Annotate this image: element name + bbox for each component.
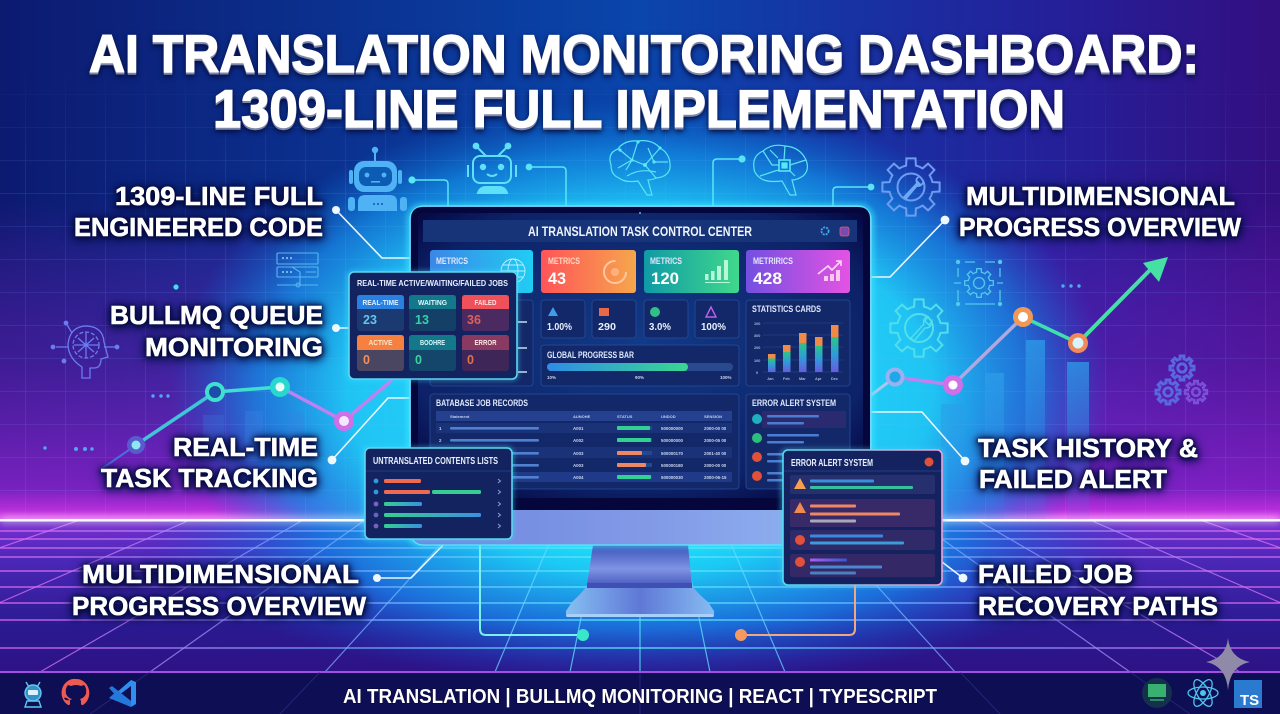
status cell: waiting: WAITING <box>418 298 447 307</box>
database job records table: 2000-06-15 <box>704 475 727 480</box>
status cell: real-time: 23 <box>363 313 377 327</box>
icon: github <box>62 679 89 705</box>
stat tiles: 3.0% <box>649 322 671 333</box>
status cell: error: 0 <box>467 353 474 367</box>
metric card: blue: METRICS <box>436 256 468 266</box>
status cell: error <box>462 335 509 371</box>
statistics cards bar chart <box>746 300 850 386</box>
statistics cards bar chart: 100 <box>754 322 760 326</box>
label: task history and failed alert <box>978 435 1198 494</box>
status cell: waiting <box>409 295 456 331</box>
status cell: boohre: BOOHRE <box>420 338 445 347</box>
global progress bar: 90% <box>635 375 644 380</box>
left line chart <box>100 377 392 470</box>
icon: AI head <box>51 321 119 378</box>
database job records table: A002 <box>573 438 584 443</box>
database job records table: BATABASE JOB RECORDS <box>436 398 528 409</box>
metric card: teal: METRICS <box>650 256 682 266</box>
statistics cards bar chart: Apr <box>815 377 822 381</box>
statistics cards bar chart: 100 <box>754 359 760 363</box>
database job records table: A003 <box>573 451 584 456</box>
icon: footer AI mascot <box>25 682 41 707</box>
database job records table: 2000-00 00 <box>704 463 727 468</box>
icon: typescript <box>1234 680 1262 709</box>
statistics cards bar chart: 300 <box>754 334 760 338</box>
database job records table <box>430 394 739 489</box>
label: real-time task tracking <box>101 434 318 493</box>
database job records table: 2 <box>439 438 442 443</box>
statistics cards bar chart: Mar <box>799 377 806 381</box>
global progress bar: 10% <box>547 375 556 380</box>
main title <box>89 25 1199 139</box>
connector lines <box>328 155 969 641</box>
icon: three small gears <box>1156 356 1207 404</box>
statistics cards bar chart: Dec <box>831 377 838 381</box>
overlay panel: real-time jobs: REAL-TIME ACTIVE/WAITING/FAILED JOBS <box>357 278 508 288</box>
statistics cards bar chart: 200 <box>754 346 760 350</box>
label: multidimensional progress overview left <box>72 561 367 621</box>
label: multidimensional progress overview right: PROGRESS OVERVIEW <box>959 214 1242 242</box>
database job records table: 1 <box>439 426 442 431</box>
dashboard header: AI TRANSLATION TASK CONTROL CENTER <box>528 223 752 239</box>
status cell: active: ACTIVE <box>368 338 392 347</box>
label: task history and failed alert: TASK HISTORY & <box>978 435 1198 463</box>
icon: react <box>1188 677 1218 709</box>
overlay panel: real-time jobs <box>346 270 519 381</box>
metric card: purple: METRIRICS <box>753 256 793 266</box>
label: multidimensional progress overview right <box>959 183 1242 242</box>
error alert panel on screen <box>746 394 850 489</box>
metric card: orange: METRICS <box>548 256 580 266</box>
metric card: teal <box>644 250 739 293</box>
status cell: boohre: 0 <box>415 353 422 367</box>
metric card: teal: 120 <box>651 270 679 288</box>
label: real-time task tracking: TASK TRACKING <box>101 465 318 493</box>
right line chart with arrow <box>870 257 1168 520</box>
status cell: active: 0 <box>363 353 370 367</box>
database job records table: AUNOHE <box>573 414 591 419</box>
statistics cards bar chart: Feb <box>783 377 790 381</box>
icon: wrench gear cyan <box>890 299 948 357</box>
status cell: real-time: REAL-TIME <box>362 298 398 307</box>
status cell: error: ERROR <box>474 338 497 347</box>
label: bullmq queue monitoring: MONITORING <box>145 334 323 362</box>
overlay panel: error alert system <box>780 448 945 587</box>
status cell: failed: FAILED <box>474 298 497 307</box>
icon: dark badge <box>1142 678 1172 708</box>
label: 1309-line full engineered code: 1309-LINE FULL <box>115 183 323 211</box>
status cell: real-time <box>357 295 404 331</box>
statistics cards bar chart: Jan <box>767 377 774 381</box>
label: multidimensional progress overview left: MULTIDIMENSIONAL <box>82 561 359 589</box>
icon: vscode <box>109 680 136 707</box>
metric card: orange: 43 <box>548 270 566 288</box>
status cell: waiting: 13 <box>415 313 429 327</box>
footer text: AI TRANSLATION | BULLMQ MONITORING | REACT | TYPESCRIPT <box>343 686 937 708</box>
label: bullmq queue monitoring <box>110 302 323 362</box>
decorative dots <box>43 284 1081 451</box>
status cell: active <box>357 335 404 371</box>
monitor stand <box>566 545 714 617</box>
dashboard header <box>423 220 857 242</box>
icon: typescript: TS <box>1240 692 1259 709</box>
overlay panel: error alert system: ERROR ALERT SYSTEM <box>791 458 873 469</box>
label: 1309-line full engineered code <box>74 183 323 242</box>
label: multidimensional progress overview right: MULTIDIMENSIONAL <box>966 183 1235 211</box>
stat tiles: 100% <box>701 322 726 333</box>
hidden left panel <box>430 300 533 386</box>
error alert panel on screen: ERROR ALERT SYSTEM <box>752 398 836 409</box>
database job records table: Statement <box>450 414 470 419</box>
main title: 1309-LINE FULL IMPLEMENTATION <box>213 80 1065 139</box>
label: real-time task tracking: REAL-TIME <box>173 434 318 462</box>
metric card: purple <box>746 250 850 293</box>
global progress bar <box>541 345 739 386</box>
metric card: purple: 428 <box>753 270 782 288</box>
statistics cards bar chart: STATISTICS CARDS <box>752 304 821 315</box>
icon: outline robot <box>468 144 516 193</box>
database job records table: 2000-05 00 <box>704 438 727 443</box>
overlay panel: untranslated contents <box>362 446 514 541</box>
database job records table: A001 <box>573 426 584 431</box>
icon: warning triangle <box>794 502 806 513</box>
metric card: blue <box>430 250 533 293</box>
database job records table: A004 <box>573 475 584 480</box>
label: multidimensional progress overview left: PROGRESS OVERVIEW <box>72 593 367 621</box>
database job records table: 500000000 <box>661 438 684 443</box>
label: failed job recovery paths: FAILED JOB <box>978 561 1133 589</box>
stat tiles: 290 <box>598 322 616 333</box>
icon: filled robot <box>348 147 407 211</box>
database job records table: 500000180 <box>661 463 684 468</box>
global progress bar: 100% <box>720 375 732 380</box>
status cell: failed <box>462 295 509 331</box>
overlay panel: untranslated contents: UNTRANSLATED CONTENTS LISTS <box>373 456 498 467</box>
database job records table: UNDOD <box>661 414 676 419</box>
database job records table: A003 <box>573 463 584 468</box>
status cell: failed: 36 <box>467 313 481 327</box>
icon: gear in frame <box>954 260 1003 306</box>
background: sky gradient and grid <box>0 0 1280 520</box>
label: failed job recovery paths <box>978 561 1218 621</box>
status cell: boohre <box>409 335 456 371</box>
footer bar <box>0 671 1280 714</box>
database job records table: 2000-00 00 <box>704 426 727 431</box>
label: 1309-line full engineered code: ENGINEERED CODE <box>74 214 323 242</box>
stat tiles <box>541 300 739 338</box>
background: perspective floor grid <box>0 517 1280 714</box>
label: failed job recovery paths: RECOVERY PATHS <box>978 593 1218 621</box>
metric card: orange <box>541 250 636 293</box>
monitor frame <box>406 203 875 548</box>
global progress bar: GLOBAL PROGRESS BAR <box>547 350 634 361</box>
database job records table: 500000170 <box>661 451 684 456</box>
main title: AI TRANSLATION MONITORING DASHBOARD: <box>89 25 1199 84</box>
statistics cards bar chart: 0 <box>756 371 758 375</box>
database job records table: STATUS <box>617 414 633 419</box>
icon: server stack <box>277 253 318 287</box>
database job records table: SENSION <box>704 414 722 419</box>
stat tiles: 1.00% <box>547 322 572 333</box>
database job records table: 500000000 <box>661 426 684 431</box>
icon: chip brain <box>754 145 807 195</box>
database job records table: 2001-40 00 <box>704 451 727 456</box>
database job records table: 500000030 <box>661 475 684 480</box>
icon: gemini star <box>1206 638 1250 690</box>
label: bullmq queue monitoring: BULLMQ QUEUE <box>110 302 323 330</box>
icon: network brain <box>610 140 670 195</box>
icon: wrench gear top <box>882 158 940 216</box>
label: task history and failed alert: FAILED ALERT <box>979 466 1167 494</box>
icon: warning triangle <box>794 478 806 489</box>
